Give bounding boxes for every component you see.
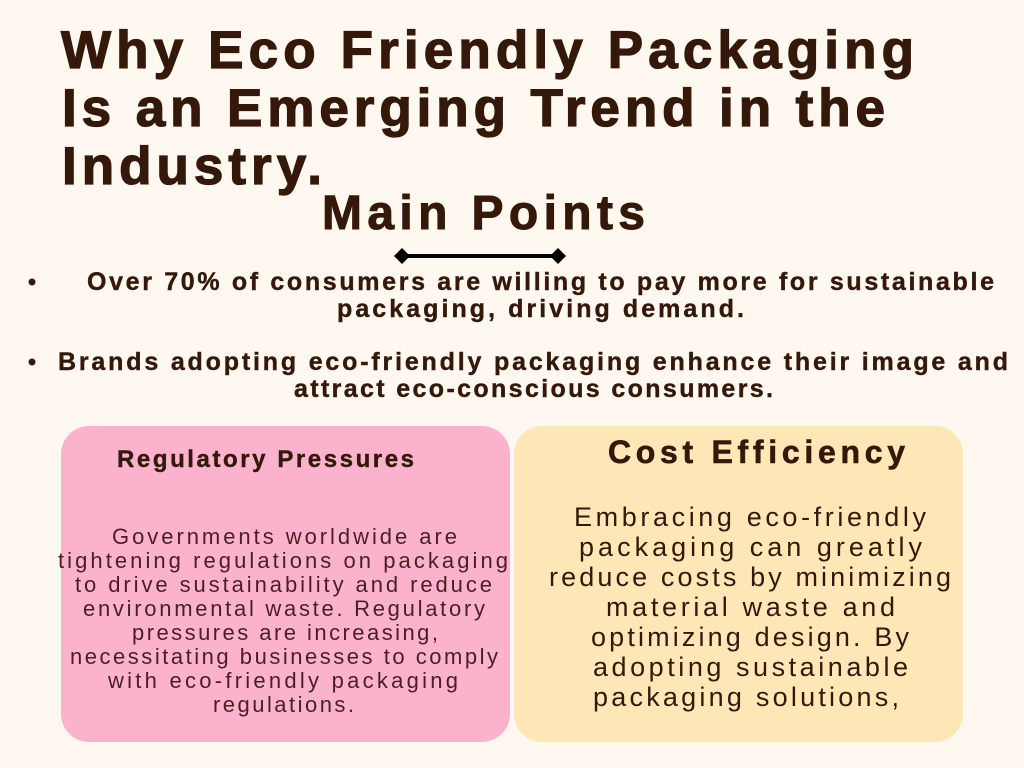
- title: Is an Emerging Trend in the: [62, 79, 885, 138]
- panel text: regulatory pressures: necessitating businesses to comply: [70, 644, 498, 669]
- bullet: consumers: packaging, driving demand.: [337, 295, 744, 323]
- panel text: regulatory pressures: environmental waste. Regulatory: [83, 596, 485, 621]
- bullet: brands: attract eco-conscious consumers.: [294, 375, 773, 403]
- panel text: regulatory pressures: [58, 524, 508, 717]
- panel text: regulatory pressures: tightening regulations on packaging: [58, 548, 508, 573]
- panel text: cost efficiency: adopting sustainable: [593, 652, 908, 682]
- panel text: regulatory pressures: pressures are increasing,: [132, 620, 438, 645]
- panel text: regulatory pressures: with eco-friendly packaging: [107, 668, 458, 693]
- bullet: consumers: [28, 268, 994, 323]
- panel heading: cost efficiency: Cost Efficiency: [608, 434, 905, 470]
- panel text: regulatory pressures: to drive sustainability and reduce: [75, 572, 492, 597]
- panel: cost efficiency: [514, 426, 963, 742]
- panel text: cost efficiency: optimizing design. By: [591, 622, 910, 652]
- panel text: cost efficiency: Embracing eco-friendly: [574, 502, 926, 532]
- title: [61, 21, 914, 196]
- panel text: cost efficiency: material waste and: [606, 592, 895, 622]
- bullet: brands: Brands adopting eco-friendly packaging enhance their image and: [58, 348, 1008, 376]
- bullet: consumers: Over 70% of consumers are willing to pay more for sustainable: [87, 268, 994, 296]
- panel heading: regulatory pressures: Regulatory Pressures: [117, 446, 414, 473]
- heading: main points: Main Points: [322, 187, 645, 240]
- panel text: regulatory pressures: Governments worldwide are: [112, 524, 457, 549]
- bullet: brands: [28, 348, 1008, 403]
- panel text: cost efficiency: [549, 502, 951, 712]
- panel text: cost efficiency: packaging can greatly: [579, 532, 922, 562]
- panel text: cost efficiency: reduce costs by minimizing: [549, 562, 951, 592]
- divider with diamond ends: [394, 248, 566, 264]
- title: Why Eco Friendly Packaging: [61, 21, 914, 80]
- panel text: cost efficiency: packaging solutions,: [593, 682, 899, 712]
- panel: regulatory pressures: [58, 426, 510, 742]
- title: Industry.: [62, 137, 322, 196]
- panel text: regulatory pressures: regulations.: [213, 692, 354, 717]
